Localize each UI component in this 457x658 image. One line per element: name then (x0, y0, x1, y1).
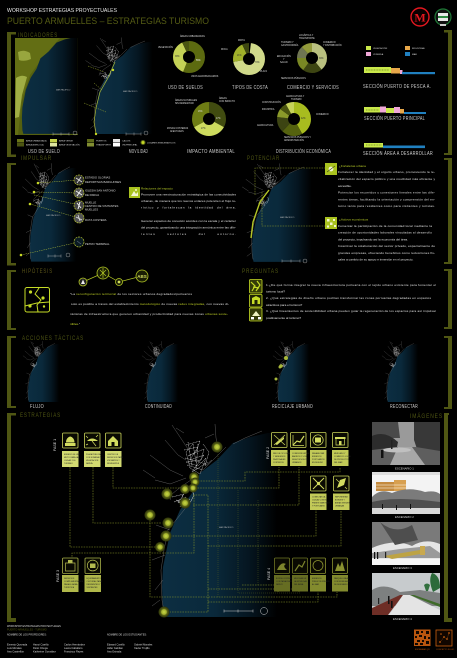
logo: red M: M (414, 10, 426, 24)
landmark: iglesia san antonio: DE PADUA (85, 193, 99, 197)
section legend: INDUSTRIAL (412, 47, 426, 50)
credits: Gabriel Morales (134, 642, 153, 646)
credits: Katherine González (33, 650, 56, 654)
donut chart: impacto ambiental: ZONAS COSTERAS (167, 127, 189, 130)
card: fase 1 building: CIUDAD Y EL (64, 459, 76, 462)
card: fase 2 round icon: REHABILITAR (312, 452, 325, 455)
logo: university seal (435, 9, 451, 26)
card: fase 1 building: MIXTO PARA LA (64, 456, 79, 459)
card: fase 3 building: TURÍSTICA (64, 586, 75, 589)
card: fase 4 graph: DEL ÁREA (294, 583, 304, 586)
heading: indicadores: INDICADORES (18, 32, 58, 39)
map: reciclaje urbano (273, 341, 309, 402)
donut chart: uso de suelos: 56% (196, 60, 201, 62)
section legend: VEGETACIÓN (373, 47, 388, 50)
caption: reconectar: RECONECTAR (390, 404, 418, 410)
landmark: petro terminal (74, 237, 110, 247)
map: strategies with connection lines and locations (70, 424, 341, 618)
donut chart: impacto ambiental: ÁREAS (219, 97, 227, 100)
map legend: ÁREA VERDE (59, 140, 74, 142)
caption: comercio y servicios: COMERCIO Y SERVICIOS (287, 85, 339, 91)
card: fase 2 chart (290, 432, 310, 466)
donut chart: comercio y servicios: EDUCACIÓN (277, 55, 291, 58)
text block: preguntas: 3. ¿Qué lineamientos de sostenibilidad urbana pueden guiar la regeneración de los espacios para así impulsar (266, 309, 436, 313)
donut chart: uso de suelos: ÁREAS URBANIZADAS (180, 35, 205, 38)
donut chart: uso de suelos: 38% (175, 56, 180, 58)
card: fase 2 crossing: COSTEROS (273, 462, 284, 464)
caption: sección puerto de pesca: SECCIÓN PUERTO DE PESCA A. (363, 83, 431, 90)
landmark: estadio glorias deportivas: ESTADIO GLORIAS (85, 176, 110, 180)
section bar: puerto de pesca (364, 67, 435, 74)
map legend: VÍA PRINCIPAL (122, 144, 138, 146)
text block: activos económicos: ¿Activos económicos (339, 218, 369, 222)
credits: Francisco Reyes (64, 650, 84, 654)
map legend: PUERTOS (96, 140, 107, 142)
heading: imágenes: IMÁGENES (410, 411, 443, 420)
donut chart: comercio y servicios: GASTRONOMÍA (281, 44, 299, 47)
donut chart: tipos de costa (221, 39, 268, 73)
card: fase 3 round plaza: VISITANTES (86, 586, 98, 589)
text block: relaciones del espacio (141, 186, 236, 236)
donut chart: distribución económica: SERVICIOS PÚBLICOS Y (284, 136, 311, 139)
donut chart: impacto ambiental: CON IMPACTO (219, 100, 235, 103)
credits: Ernesto Quezada (7, 642, 28, 646)
caption: uso de suelos: USO DE SUELOS (168, 85, 203, 91)
card: fase 2 vegetation: REFORESTAR (335, 496, 348, 498)
section legend: VIVIENDA (373, 53, 384, 56)
icon: relaciones del espacio (129, 187, 140, 198)
text block: hipótesis: nibles." (70, 322, 80, 326)
card: fase 2 crossroads: CONECTAR LA (312, 496, 326, 498)
card: fase 4 graph (292, 558, 308, 592)
card: fase 1 facility: RESIDENTES (107, 463, 120, 465)
landmark: iglesia san antonio: IGLESIA SAN ANTONIO (85, 188, 116, 192)
card: fase 1 building: TURISMO (64, 463, 73, 465)
icon: pregunta 2 (250, 294, 262, 307)
text block: relaciones del espacio: del proyecto, garantizando una integración armónica entre las dife- (141, 226, 236, 230)
heading: estrategias: ESTRATEGIAS (20, 412, 61, 419)
text block: fortalezas urbanas: torno tanto para residentes como para visitantes y turistas. (338, 204, 435, 208)
credits: Xavier Trujillo (134, 646, 150, 650)
text block: relaciones del espacio: Generar espacios de conexión acordes con la escala y el carácter (141, 219, 236, 223)
map: reconectar (382, 341, 418, 402)
credits: Laura Caballero (64, 646, 83, 650)
donut chart: tipos de costa: 21% (237, 55, 242, 57)
photo: escenario 2 (372, 472, 440, 514)
icon: hipótesis territorial (25, 288, 50, 312)
credits (7, 625, 153, 654)
donut chart: comercio y servicios: SALUD (280, 61, 288, 64)
text block: hipótesis: námicas de infraestructura que generen urbanidad y productividad para nuevas zonas urbanas soste- (70, 312, 228, 316)
section bar: puerto principal (364, 106, 426, 114)
icon: fortalezas urbanas (325, 163, 337, 175)
card: fase 3 building: PARA EL ÁREA (64, 583, 78, 586)
card: fase 2 market: DEL MAR (334, 461, 343, 464)
card: fase 2 round icon: ESPACIOS (312, 455, 322, 458)
credits: Carlos Hernández (64, 642, 86, 646)
text block: activos económicos (338, 218, 435, 262)
card: fase 1 facility: SERVICIOS PARA (107, 456, 124, 459)
text block: preguntas: turismo local? (266, 290, 285, 294)
map: strategies with connection lines and locations: MAR PACIFICO (219, 526, 234, 529)
card: fase 2 crossroads: CIUDAD CON EL (312, 498, 327, 502)
credits: Edward Carrillo (107, 642, 125, 646)
logo: red M (411, 8, 429, 26)
heading: impulsar: IMPULSAR (21, 155, 52, 162)
QR code (414, 630, 430, 651)
credits: Ana Estrada (107, 650, 122, 654)
card: fase 2 round icon: EN DESUSO (312, 462, 324, 464)
credits: NOMBRE DE LOS PROFESORES: (7, 634, 47, 636)
card: fase 4 trees: DE DESCANSO (334, 583, 348, 586)
donut chart: distribución económica: COMERCIO (316, 114, 329, 116)
caption: flujo: FLUJO (30, 404, 44, 410)
text block: hipótesis: "La reconfiguración territorial de los sectores urbanos degradados/portuarios (70, 292, 192, 296)
donut chart: distribución económica: 42% (301, 118, 306, 120)
title block: PUERTO ARMUELLES – ESTRATEGIAS TURISMO (7, 15, 209, 26)
heading: preguntas: PREGUNTAS (242, 268, 279, 275)
text block: activos económicos: del proyecto, impulsando así la economía del área. (338, 238, 408, 242)
section legend: MAR (412, 53, 417, 56)
credits: Dioto Ortega (33, 646, 48, 650)
card: fase 4 round icon (310, 558, 330, 592)
card: fase 2 round icon: PORTUARIOS (312, 458, 325, 461)
text block: fortalezas urbanas: Potenciar los recorridos y conexiones lineales entre las dife- (338, 190, 435, 194)
caption: sección puerto principal: SECCIÓN PUERTO PRINCIPAL (364, 115, 425, 122)
QR code: ESCANEAR QR (415, 648, 430, 651)
donut chart: impacto ambiental: 47% (216, 118, 221, 120)
icon: network of hypothesis nodes (79, 267, 148, 286)
map: flujo (23, 341, 59, 402)
card: fase 2 market: DE PRODUCTOS (334, 459, 350, 461)
phase label: fase 4: FASE 4 (267, 568, 271, 580)
text block: fortalezas urbanas (338, 164, 435, 208)
card: fase 4 graph: MEJORAS EN (294, 577, 307, 580)
caption: escenario 1: ESCENARIO 1 (395, 466, 414, 470)
donut chart: comercio y servicios: LOGÍSTICA Y (299, 34, 314, 37)
donut chart: impacto ambiental: AFECTADAS (170, 130, 184, 133)
text block: fortalezas urbanas: ¿Fortalezas urbana (339, 164, 366, 168)
card: fase 3 round plaza: CULTURAL PARA (86, 580, 103, 583)
section frame: potenciar right bracket (444, 158, 452, 264)
text block: fortalezas urbanas: rentes áreas, facilitando la orientación y comprensión del en- (338, 198, 435, 202)
credits: Hanoi Carrillo (33, 642, 49, 646)
card: fase 1 building: ESPACIO DE USO (64, 453, 81, 456)
card: fase 2 vegetation: URBANAS (335, 504, 345, 508)
card: fase 2 crossroads (310, 476, 330, 510)
donut chart: comercio y servicios: TRANSPORTE (299, 37, 315, 40)
section frame: estrategias left bracket (7, 413, 16, 622)
donut chart: tipos de costa: 70% (255, 62, 260, 64)
donut chart: comercio y servicios: Y (283, 59, 285, 61)
card: fase 2 crossing: Y SENDEROS (273, 456, 286, 458)
card: fase 4 round icon: ESPACIOS (312, 577, 322, 580)
map: movilidad (84, 38, 152, 136)
donut chart: distribución económica: CONSTRUCCIÓN (262, 101, 281, 104)
card: fase 2 crossing: RED DE CICLOVÍAS (273, 452, 291, 455)
donut chart: comercio y servicios (277, 34, 342, 80)
phase label: fase 3: FASE 3 (56, 570, 60, 582)
map: impulsar with landmarks (20, 163, 79, 262)
landmark: petro terminal: PETRO TERMINAL (85, 242, 110, 246)
donut chart: distribución económica: TURISMO (291, 99, 302, 101)
map: impulsar with landmarks: MAR PACIFICO (46, 214, 61, 217)
card: fase 1 plaza (84, 433, 101, 467)
map legend: CALLES (122, 140, 131, 142)
card: fase 2 chart: NUEVOS NODOS (292, 459, 308, 461)
card: fase 2 crossroads: Y PORTUARIO (312, 504, 325, 508)
credits: Ana Castrellón (7, 650, 25, 654)
donut chart: comercio y servicios: COMERCIO (323, 42, 336, 44)
card: fase 1 facility (105, 433, 124, 467)
section frame: indicadores left bracket (7, 32, 16, 157)
credits: PUERTO ARMUELLES - TURISMO (7, 628, 47, 632)
heading: acciones tácticas: ACCIONES TÁCTICAS (22, 333, 84, 342)
icon: network of hypothesis nodes: ABS (137, 274, 147, 279)
card: fase 2 round icon (310, 432, 326, 466)
map: potenciar: MAR PACIFICO (280, 216, 295, 219)
card: fase 1 plaza: VEGETACIÓN (86, 459, 99, 462)
text block: preguntas: 2. ¿Qué estrategias de diseño urbano podrían transformar las zonas portuarias degradadas en espacios (266, 296, 431, 300)
donut chart: comercio y servicios: TURISMO Y (281, 42, 294, 44)
card: fase 3 building: COMPLEMENTARIOS (64, 580, 84, 583)
card: fase 2 chart: CONEXIÓN ENTRE (292, 452, 310, 455)
map: uso de suelo: MAR PACIFICO (56, 88, 71, 92)
map legend: TRANSPORTE (96, 144, 111, 146)
card: fase 3 round plaza: EQUIPAMIENTO (86, 577, 101, 580)
donut chart: uso de suelos: VEGETACIÓN (158, 46, 173, 49)
text block: activos económicos: Incentivar la colaboración del sector privado, especialmente de (338, 244, 435, 248)
landmark: muelle: MUELLES (85, 208, 98, 212)
card: fase 4 landscape: BORDE COSTERO (276, 578, 293, 580)
text block: relaciones del espacio: rentes sectores del entorno. (141, 232, 236, 236)
credits: Hider Gabilan (107, 646, 123, 650)
donut chart: comercio y servicios: 39% (319, 58, 324, 60)
card: fase 4 trees: CON MOBILIARIO (334, 580, 350, 583)
caption: reciclaje urbano: RECICLAJE URBANO (272, 404, 313, 410)
landmark: ruta costera: RUTA COSTERA (85, 218, 107, 222)
caption: escenario 3: ESCENARIO 3 (393, 566, 412, 570)
card: fase 2 market: COMERCIO LOCAL (334, 455, 351, 458)
card: fase 2 crossing: PEATONALES (273, 458, 286, 461)
map legend: ÁREA AGRÍCOLA (26, 144, 44, 146)
section bar: área a desarrollar (364, 143, 425, 148)
section frame: indicadores right bracket (444, 30, 452, 155)
card: fase 3 round plaza (84, 558, 103, 592)
card: fase 1 building (62, 433, 81, 467)
caption: continuidad: CONTINUIDAD (145, 404, 172, 410)
card: fase 2 vegetation: ÁREAS VERDES (335, 502, 350, 504)
card: fase 4 trees: PARQUE LINEAL (334, 577, 349, 580)
landmark: muelle: CENTRO DE VISITANTES (85, 204, 118, 208)
map legend: ÁREA VEGETACIÓN (59, 144, 80, 146)
card: fase 4 round icon: AL MAR (312, 583, 320, 586)
text block: fortalezas urbanas: accesible. (338, 184, 352, 188)
caption: movilidad: MOVILIDAD (129, 149, 148, 155)
landmark: ruta costera (74, 213, 107, 223)
text block: hipótesis: solo es posible a través del establecimiento metodológico de nuevas redes integradas, con nuevas di- (71, 302, 229, 306)
donut chart: distribución económica (257, 95, 329, 142)
card: fase 2 crossroads: FRENTE MARÍTIMO (312, 502, 330, 504)
card: fase 1 facility: VISITANTES Y (107, 459, 120, 462)
card: fase 4 landscape: NATIVO (276, 583, 283, 586)
map: uso de suelo (15, 37, 78, 136)
donut chart: distribución económica: AGRICULTURA Y (286, 95, 305, 98)
donut chart: distribución económica: ADMINISTRACIÓN (284, 139, 304, 142)
section frame: imágenes bracket (444, 413, 452, 622)
card: fase 1 plaza: PLAZA PÚBLICA (86, 453, 101, 456)
card: fase 4 graph: LA MOVILIDAD (294, 580, 308, 583)
text block: activos económicos: grandes empresas, ofreciendo beneficios como reducciones fis- (338, 251, 435, 255)
caption: escenario 2: ESCENARIO 2 (395, 515, 414, 519)
donut chart: distribución económica: AGRICULTURA (257, 124, 274, 127)
caption: distribución económica: DISTRIBUCIÓN ECONÓMICA (276, 148, 331, 155)
donut chart: comercio y servicios: Y DISTRIBUCIÓN (323, 44, 342, 47)
photo: escenario 3 (372, 522, 440, 565)
icon: orange network square (436, 630, 455, 651)
map legend: ÁREA URBANIZADA (26, 140, 47, 142)
map legend (17, 139, 176, 146)
card: fase 3 building: SERVICIOS (64, 578, 75, 580)
landmark: muelle (74, 200, 118, 212)
map: movilidad: MAR PACIFICO (123, 90, 138, 93)
section frame: hipótesis left bracket (7, 270, 16, 330)
section legend (366, 46, 426, 56)
icon: pregunta 1 (250, 280, 262, 293)
card: fase 2 market: MERCADO Y (334, 452, 346, 455)
section frame: acciones tácticas left bracket (7, 336, 16, 408)
card: fase 2 crossing (271, 432, 291, 466)
card: fase 2 chart: URBANOS (292, 461, 302, 464)
heading: hipótesis: HIPÓTESIS (22, 266, 53, 275)
title block (7, 8, 209, 26)
text block: hipótesis (70, 292, 229, 326)
photo: escenario 4 (372, 573, 440, 615)
map: potenciar (242, 163, 325, 263)
photo: escenario 1 (372, 422, 440, 465)
donut chart: tipos de costa: ROCA (221, 48, 228, 51)
card: fase 3 building (62, 558, 84, 592)
map: continuidad (142, 341, 178, 402)
landmark: muelle: MUELLE (85, 200, 96, 204)
credits: Luis Morales (7, 646, 22, 650)
landmark: estadio glorias deportivas: DEPORTIVAS BARGUNSES (85, 180, 121, 184)
caption: escenario 4: ESCENARIO 4 (393, 617, 412, 621)
donut chart: impacto ambiental: SIN DESMANTAR (175, 102, 194, 105)
phase label: fase 2: FASE 2 (266, 447, 270, 459)
caption: impacto ambiental: IMPACTO AMBIENTAL (187, 149, 235, 155)
icon: orange network square: CONCEPTO FLUJO (436, 649, 455, 651)
map legend: LUGARES EMBLEMÁTICOS (147, 142, 176, 144)
card: fase 4 landscape (274, 558, 293, 592)
donut chart: impacto ambiental (167, 97, 235, 133)
landmark: estadio glorias deportivas (74, 175, 121, 185)
section frame: acciones tácticas right bracket (444, 336, 452, 409)
donut chart: impacto ambiental: 26% (198, 111, 203, 113)
donut chart: impacto ambiental: 27% (201, 128, 206, 130)
title block: WORKSHOP ESTRATEGIAS PROYECTUALES (7, 8, 117, 14)
icon: activos económicos (325, 217, 337, 229)
text block: activos económicos: creación de oportunidades laborales vinculadas al desarrollo (338, 230, 432, 234)
card: fase 2 chart: BARRIOS Y LOS (292, 455, 307, 458)
card: fase 4 landscape: CON PAISAJISMO (276, 580, 292, 583)
donut chart: tipos de costa: PLAYA (260, 70, 268, 73)
donut chart: uso de suelos (158, 35, 219, 78)
donut chart: uso de suelos: USOS AGROPECUARIOS (191, 75, 219, 78)
card: fase 1 plaza: CON SOMBRA Y (86, 456, 101, 459)
text block: preguntas (266, 283, 436, 320)
text block: activos económicos: Fomentar la participación de la comunidad local mediante la (338, 224, 432, 228)
landmark: iglesia san antonio (74, 188, 116, 198)
section frame: impulsar left bracket (7, 163, 16, 266)
donut chart: tipos de costa: MIXTA (238, 39, 245, 42)
credits: WORKSHOP ESTRATEGIAS PROYECTUALES (7, 625, 61, 628)
card: fase 4 round icon: PÚBLICOS FRENTE (312, 580, 330, 583)
card: fase 4 trees (332, 558, 350, 592)
caption: tipos de costa: TIPOS DE COSTA (232, 85, 268, 91)
card: fase 3 round plaza: RESIDENTES Y (86, 584, 101, 586)
text block: fortalezas urbanas: Fortalecer la identidad y el orgullo urbano, promoviendo la re- (338, 170, 435, 174)
text block: preguntas: 1.¿De qué forma integrar la nueva infraestructura portuaria con el tejido urbano existente para fomentar el (266, 283, 436, 287)
donut chart: impacto ambiental: ÁREAS NATURALES (175, 99, 198, 102)
text block: relaciones del espacio: urbanas, de manera que los nuevos enlaces potencien el flujo tu- (141, 199, 236, 203)
text block: relaciones del espacio: Relaciones del espacio (141, 186, 173, 190)
donut chart: distribución económica: INDUSTRIA (262, 108, 275, 111)
icon: pregunta 3 (250, 308, 262, 321)
credits: NOMBRE DE LOS ESTUDIANTES: (107, 634, 147, 636)
caption: sección área a desarrollar: SECCIÓN ÁREA A DESARROLLAR (363, 150, 433, 157)
phase label: fase 1: FASE 1 (53, 439, 57, 451)
donut chart: comercio y servicios: SERVICIOS PÚBLICOS (281, 77, 306, 80)
text block: relaciones del espacio: rístico y fortalezcan la identidad del área. (141, 206, 236, 210)
text block: activos económicos: cales a cambio de su apoyo e inversión en el proyecto. (338, 258, 413, 262)
card: fase 1 plaza: NATIVA (86, 462, 93, 465)
text block: preguntas: positivamente al turismo? (266, 316, 301, 320)
card: fase 2 vegetation (333, 476, 350, 510)
text block: preguntas: atractivos para el turismo? (266, 303, 303, 307)
card: fase 2 market (332, 432, 351, 466)
card: fase 2 vegetation: BORDES Y (335, 500, 345, 502)
section frame: preguntas right bracket (444, 269, 452, 329)
heading: potenciar: POTENCIAR (247, 155, 280, 162)
text block: fortalezas urbanas: vitalización del espacio público y una movilidad más eficiente y (338, 177, 435, 181)
text block: relaciones del espacio: Promover una reestructuración estratégica de las conectividades (141, 192, 236, 196)
caption: uso de suelo: USO DE SUELO (28, 149, 60, 155)
card: fase 1 facility: CENTRO DE (107, 454, 119, 456)
